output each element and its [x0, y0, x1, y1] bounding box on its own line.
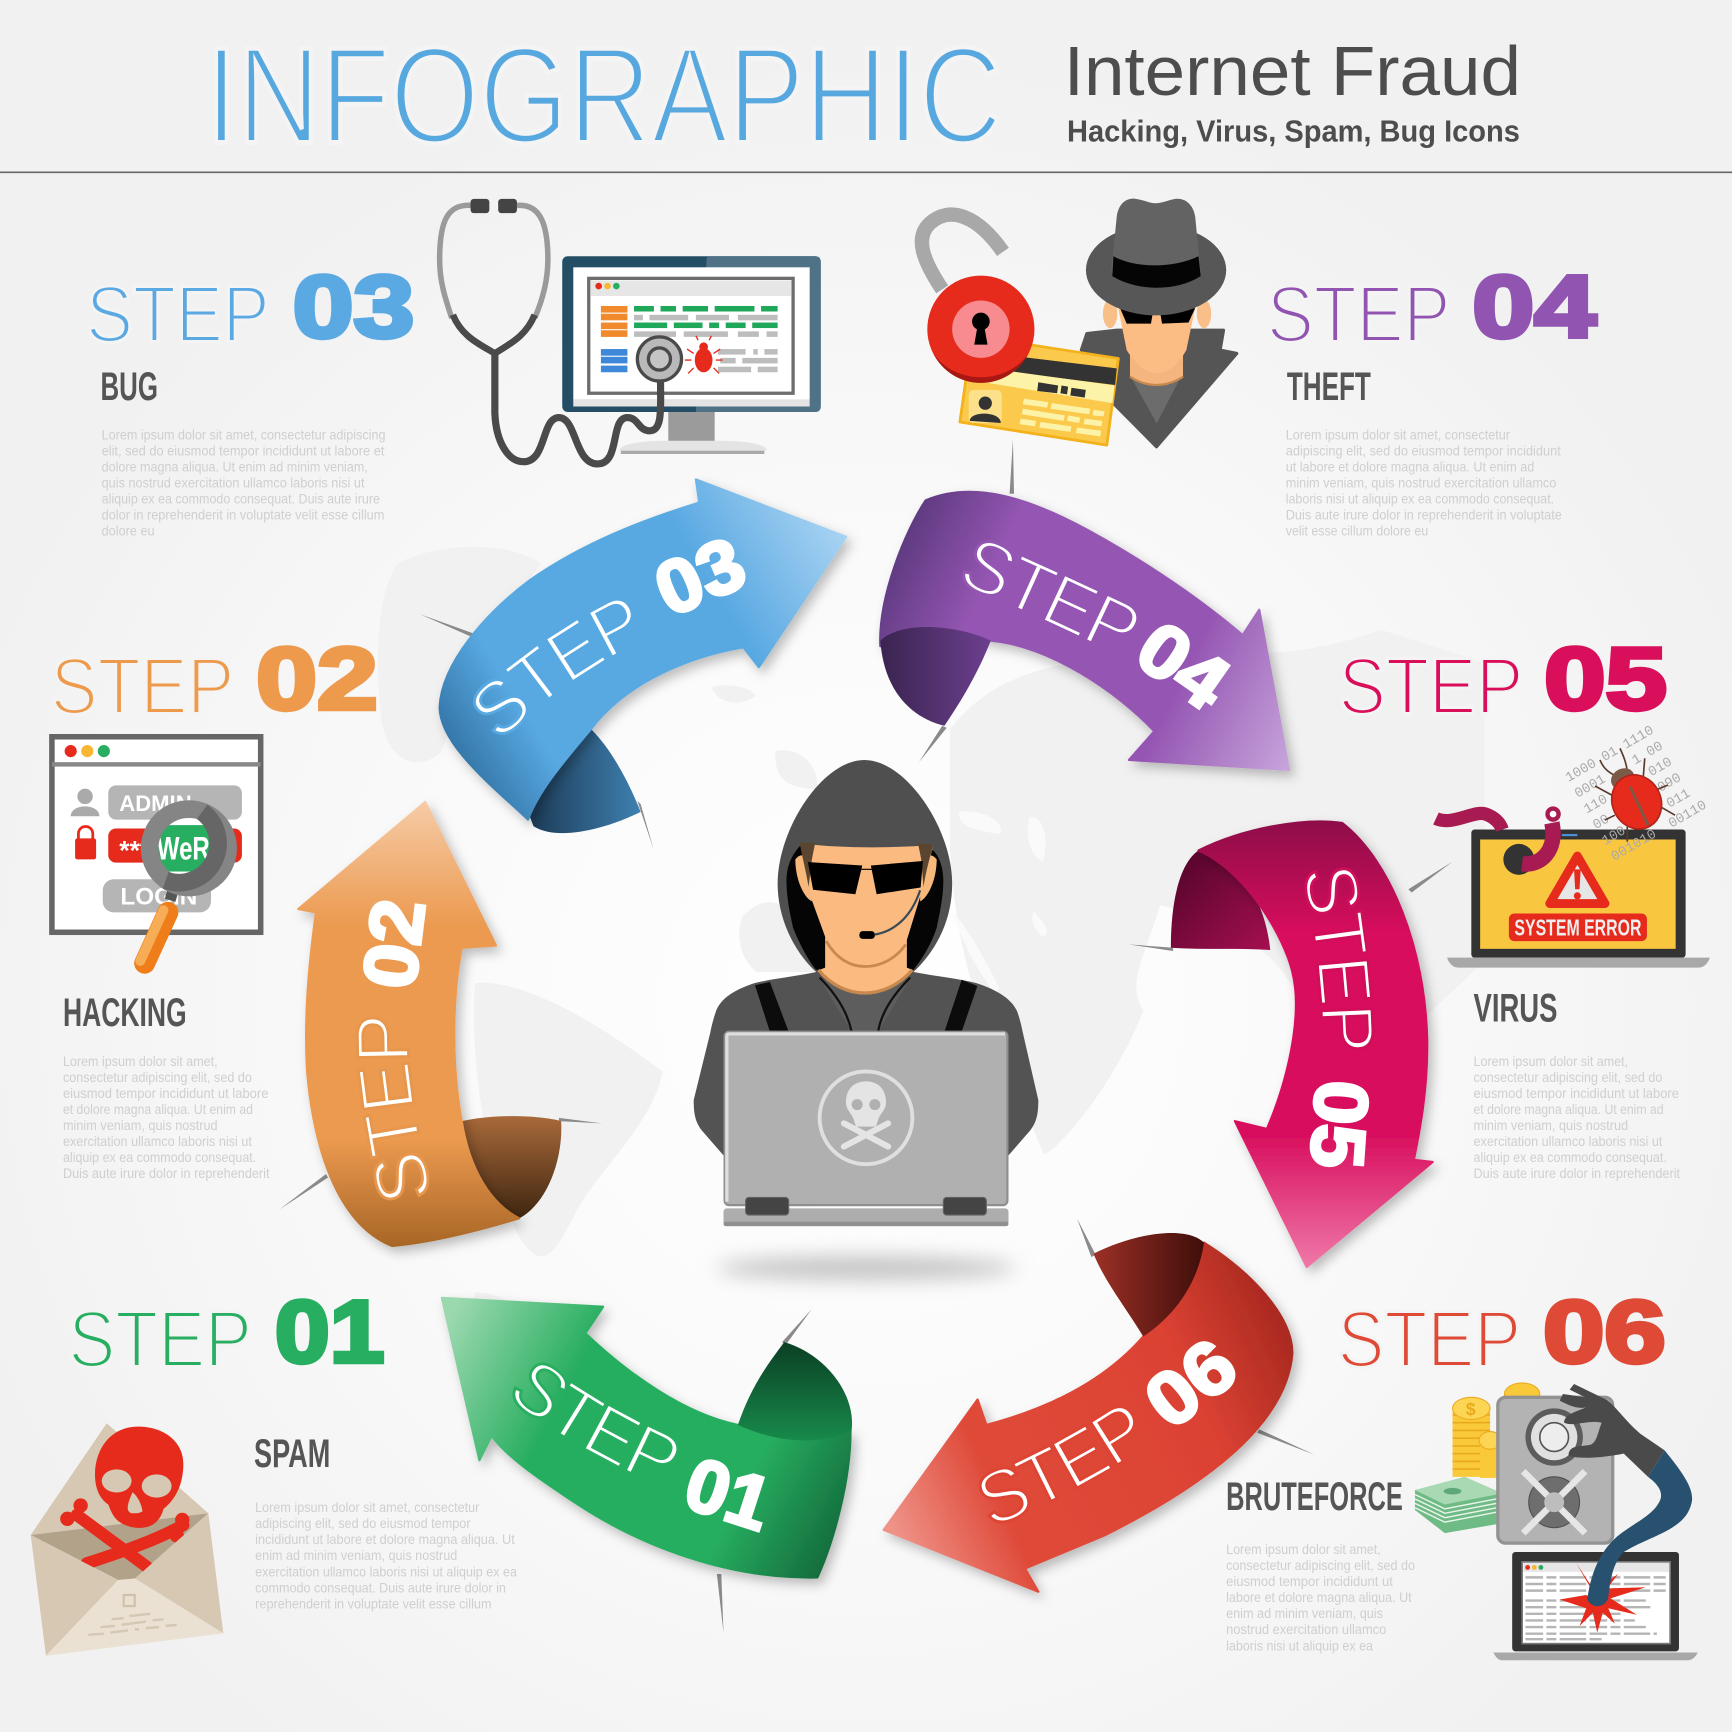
step heading 06: STEP	[1338, 1294, 1521, 1383]
label: SPAM: SPAM	[254, 1432, 330, 1476]
icon: navy sleeve	[1587, 1450, 1692, 1606]
step heading 02: STEP	[51, 642, 234, 731]
text block: hacking: exercitation ullamco laboris nisi ut	[63, 1134, 252, 1149]
text block: bruteforce: labore et dolore magna aliqua. Ut	[1226, 1590, 1412, 1605]
label: THEFT: THEFT	[1287, 365, 1371, 409]
text block: theft: velit esse cillum dolore eu	[1286, 524, 1428, 539]
text block: bug: Lorem ipsum dolor sit amet, consectetur adipiscing	[102, 428, 386, 443]
icon: laptop system error: 110 010	[1582, 755, 1675, 818]
arrow label: STEP 06	[978, 1322, 1252, 1524]
icon: ID card	[960, 336, 1118, 445]
arrow label: STEP 06: STEP	[978, 1408, 1134, 1524]
step heading 03	[86, 257, 414, 358]
icon: coins	[1453, 1383, 1540, 1478]
icon: red beetle	[1595, 748, 1675, 842]
text block: virus: aliquip ex ea commodo consequat.	[1474, 1150, 1667, 1165]
icon: safe, coins, money, glove and laptop	[1415, 1383, 1698, 1660]
text block: spam	[255, 1500, 517, 1611]
arrow label: STEP 06: 06	[1129, 1322, 1252, 1444]
ribbon slits	[279, 440, 1453, 1633]
icon: laptop system error	[1436, 720, 1710, 968]
label: VIRUS: VIRUS	[1474, 987, 1557, 1031]
icon: monitor with bug	[562, 256, 821, 454]
step heading 04: 04	[1472, 257, 1596, 356]
text block: virus: et dolore magna aliqua. Ut enim ad	[1474, 1102, 1664, 1117]
arrow label: STEP 05: STEP	[1304, 868, 1372, 1048]
text block: virus: Duis aute irure dolor in reprehenderit	[1474, 1166, 1680, 1181]
text block: virus: consectetur adipiscing elit, sed do	[1474, 1070, 1663, 1085]
label: BRUTEFORCE: BRUTEFORCE	[1226, 1475, 1403, 1519]
icon: safe	[1498, 1397, 1613, 1543]
text block: theft: Duis aute irure dolor in reprehenderit in voluptate	[1286, 508, 1562, 523]
text block: hacking: minim veniam, quis nostrud	[63, 1118, 218, 1133]
world map backdrop	[378, 547, 1485, 1375]
step heading 01	[68, 1282, 384, 1383]
text block: theft: ut labore et dolore magna aliqua. Ut enim ad	[1286, 460, 1534, 475]
icon: laptop system error: 001010	[1609, 827, 1660, 865]
arrow: step 05	[1170, 820, 1440, 1276]
text block: spam: commodo consequat. Duis aute irure dolor in	[255, 1580, 506, 1595]
icon: login window with magnifier: LOGIN	[120, 884, 197, 911]
icon: red bug	[685, 336, 722, 373]
panel: step 05 virus	[1339, 629, 1710, 1181]
text block: bug: aliquip ex ea commodo consequat. Duis aute irure	[102, 492, 380, 507]
step heading 06: 06	[1543, 1282, 1666, 1381]
text block: spam: adipiscing elit, sed do eiusmod tempor	[255, 1516, 471, 1531]
header	[0, 19, 1732, 172]
text block: spam: incididunt ut labore et dolore magna aliqua. Ut	[255, 1532, 515, 1547]
text block: virus: eiusmod tempor incididunt ut labore	[1474, 1086, 1679, 1101]
text block: bug: elit, sed do eiusmod tempor incididunt ut labore et	[102, 444, 385, 459]
arrow label: STEP 02: STEP	[358, 1019, 430, 1200]
arrow: step 06	[882, 1233, 1304, 1602]
icon: login window with magnifier: WeR8	[157, 830, 223, 866]
text block: bruteforce	[1226, 1542, 1415, 1653]
text block: virus: minim veniam, quis nostrud	[1474, 1118, 1628, 1133]
text block: spam: enim ad minim veniam, quis nostrud	[255, 1548, 457, 1563]
icon: red padlock	[922, 215, 1034, 383]
icon: login window with magnifier: ADMIN	[119, 791, 192, 816]
text block: bruteforce: nostrud exercitation ullamco	[1226, 1622, 1387, 1637]
text block: hacking: eiusmod tempor incididunt ut labore	[63, 1086, 269, 1101]
arrow label: STEP 04	[962, 540, 1245, 726]
center hacker with laptop	[694, 760, 1038, 1280]
arrow label: STEP 05	[1295, 868, 1385, 1171]
arrow label: STEP 04: STEP	[962, 540, 1136, 641]
text block: theft: adipiscing elit, sed do eiusmod tempor incididunt	[1286, 444, 1561, 459]
icon: login window with magnifier	[52, 737, 261, 963]
panel: step 06 bruteforce	[1226, 1282, 1698, 1660]
text block: bug: dolor in reprehenderit in voluptate velit esse cillum	[102, 508, 384, 523]
step heading 04: STEP	[1267, 269, 1450, 358]
icon: stethoscope	[440, 199, 682, 464]
arrow label: STEP 01: STEP	[512, 1362, 676, 1472]
icon: laptop system error: 1000 01 1110	[1564, 724, 1657, 786]
icon: laptop system error: 100 011	[1600, 787, 1694, 850]
step heading 05: STEP	[1339, 642, 1523, 731]
icon: laptop system error: 00 090	[1591, 771, 1684, 834]
text block: virus: Lorem ipsum dolor sit amet,	[1474, 1054, 1628, 1069]
step heading 03: 03	[293, 257, 414, 356]
icon: laptop	[1493, 1552, 1698, 1660]
step heading 01: STEP	[68, 1294, 252, 1383]
icon: spy in hat	[1081, 199, 1237, 447]
icon: skull badge	[820, 1071, 912, 1164]
panel: step 04 theft	[922, 199, 1596, 539]
label: BUG: BUG	[101, 365, 158, 409]
arrow label: STEP 05: 05	[1295, 1078, 1385, 1171]
icon: laptop system error: SYSTEM ERROR	[1514, 915, 1642, 941]
text block: bruteforce: consectetur adipiscing elit, sed do	[1226, 1558, 1415, 1573]
arrow label: STEP 02	[347, 895, 441, 1200]
arrow label: STEP 03	[473, 520, 757, 735]
icon: coins: $	[1466, 1399, 1476, 1419]
text block: hacking: aliquip ex ea commodo consequat.	[63, 1150, 256, 1165]
step heading 02	[51, 629, 378, 731]
icon: red burst	[1560, 1563, 1646, 1633]
text block: bruteforce: enim ad minim veniam, quis	[1226, 1606, 1383, 1621]
text block: hacking: et dolore magna aliqua. Ut enim ad	[63, 1102, 253, 1117]
step heading 06	[1338, 1282, 1666, 1383]
arrow: step 03	[438, 478, 854, 834]
text block: bug: quis nostrud exercitation ullamco laboris nisi ut	[102, 476, 365, 491]
map seas	[952, 811, 1047, 992]
text block: bruteforce: eiusmod tempor incididunt ut	[1226, 1574, 1393, 1589]
text block: spam: reprehenderit in voluptate velit esse cillum	[255, 1596, 492, 1611]
text block: theft: laboris nisi ut aliquip ex ea commodo consequat.	[1286, 492, 1554, 507]
step heading 05	[1339, 629, 1667, 731]
step heading 02: 02	[256, 629, 378, 728]
arrow: step 01	[440, 1296, 862, 1590]
panel: step 01 spam	[31, 1282, 517, 1656]
text block: bruteforce: laboris nisi ut aliquip ex ea	[1226, 1638, 1373, 1653]
text block: hacking	[63, 1054, 270, 1181]
arrow: step 02	[297, 800, 562, 1258]
arrow label: STEP 03: 03	[643, 520, 757, 632]
title: INFOGRAPHIC: INFOGRAPHIC	[205, 19, 1002, 172]
arrow label: STEP 04: 04	[1122, 605, 1245, 726]
arrow label: STEP 01: 01	[675, 1441, 781, 1547]
icon: laptop system error: 0001 1 00	[1573, 739, 1666, 802]
text block: bug: dolore eu	[102, 524, 155, 539]
arrow: step 04	[878, 490, 1299, 782]
heading: Internet Fraud: Internet Fraud	[1064, 32, 1521, 110]
arrow label: STEP 01	[512, 1362, 781, 1547]
subheading: Hacking, Virus, Spam, Bug Icons	[1067, 113, 1520, 148]
text block: hacking: consectetur adipiscing elit, sed do	[63, 1070, 252, 1085]
text block: virus	[1474, 1054, 1680, 1181]
step heading 04	[1267, 257, 1596, 358]
text block: virus: exercitation ullamco laboris nisi ut	[1474, 1134, 1663, 1149]
text block: bruteforce: Lorem ipsum dolor sit amet,	[1226, 1542, 1381, 1557]
text block: bug	[102, 428, 386, 539]
icon: envelope with skull	[31, 1423, 223, 1656]
icon: login window with magnifier: ***	[119, 835, 151, 865]
text block: theft: Lorem ipsum dolor sit amet, consectetur	[1286, 428, 1510, 443]
step heading 05: 05	[1544, 629, 1667, 728]
arrow label: STEP 02: 02	[347, 895, 441, 993]
text block: theft	[1286, 428, 1562, 539]
text block: hacking: Duis aute irure dolor in reprehenderit	[63, 1166, 270, 1181]
icon: worm	[1436, 809, 1559, 864]
text block: spam: exercitation ullamco laboris nisi ut aliquip ex ea	[255, 1564, 517, 1579]
icon: laptop system error: 100	[1600, 824, 1629, 850]
text block: bug: dolore magna aliqua. Ut enim ad minim veniam,	[102, 460, 368, 475]
icon: laptop system error: 001010 00110	[1609, 798, 1710, 865]
step heading 03: STEP	[86, 269, 270, 358]
label: HACKING: HACKING	[63, 991, 187, 1035]
text block: theft: minim veniam, quis nostrud exercitation ullamco	[1286, 476, 1557, 491]
text block: spam: Lorem ipsum dolor sit amet, consectetur	[255, 1500, 480, 1515]
arrow label: STEP 03: STEP	[473, 600, 631, 735]
panel: step 02 hacking	[51, 629, 378, 1181]
icon: black glove	[1560, 1384, 1665, 1477]
step heading 01: 01	[275, 1282, 384, 1381]
icon: money stack	[1415, 1477, 1502, 1533]
panel: step 03 bug	[86, 199, 821, 539]
text block: hacking: Lorem ipsum dolor sit amet,	[63, 1054, 218, 1069]
